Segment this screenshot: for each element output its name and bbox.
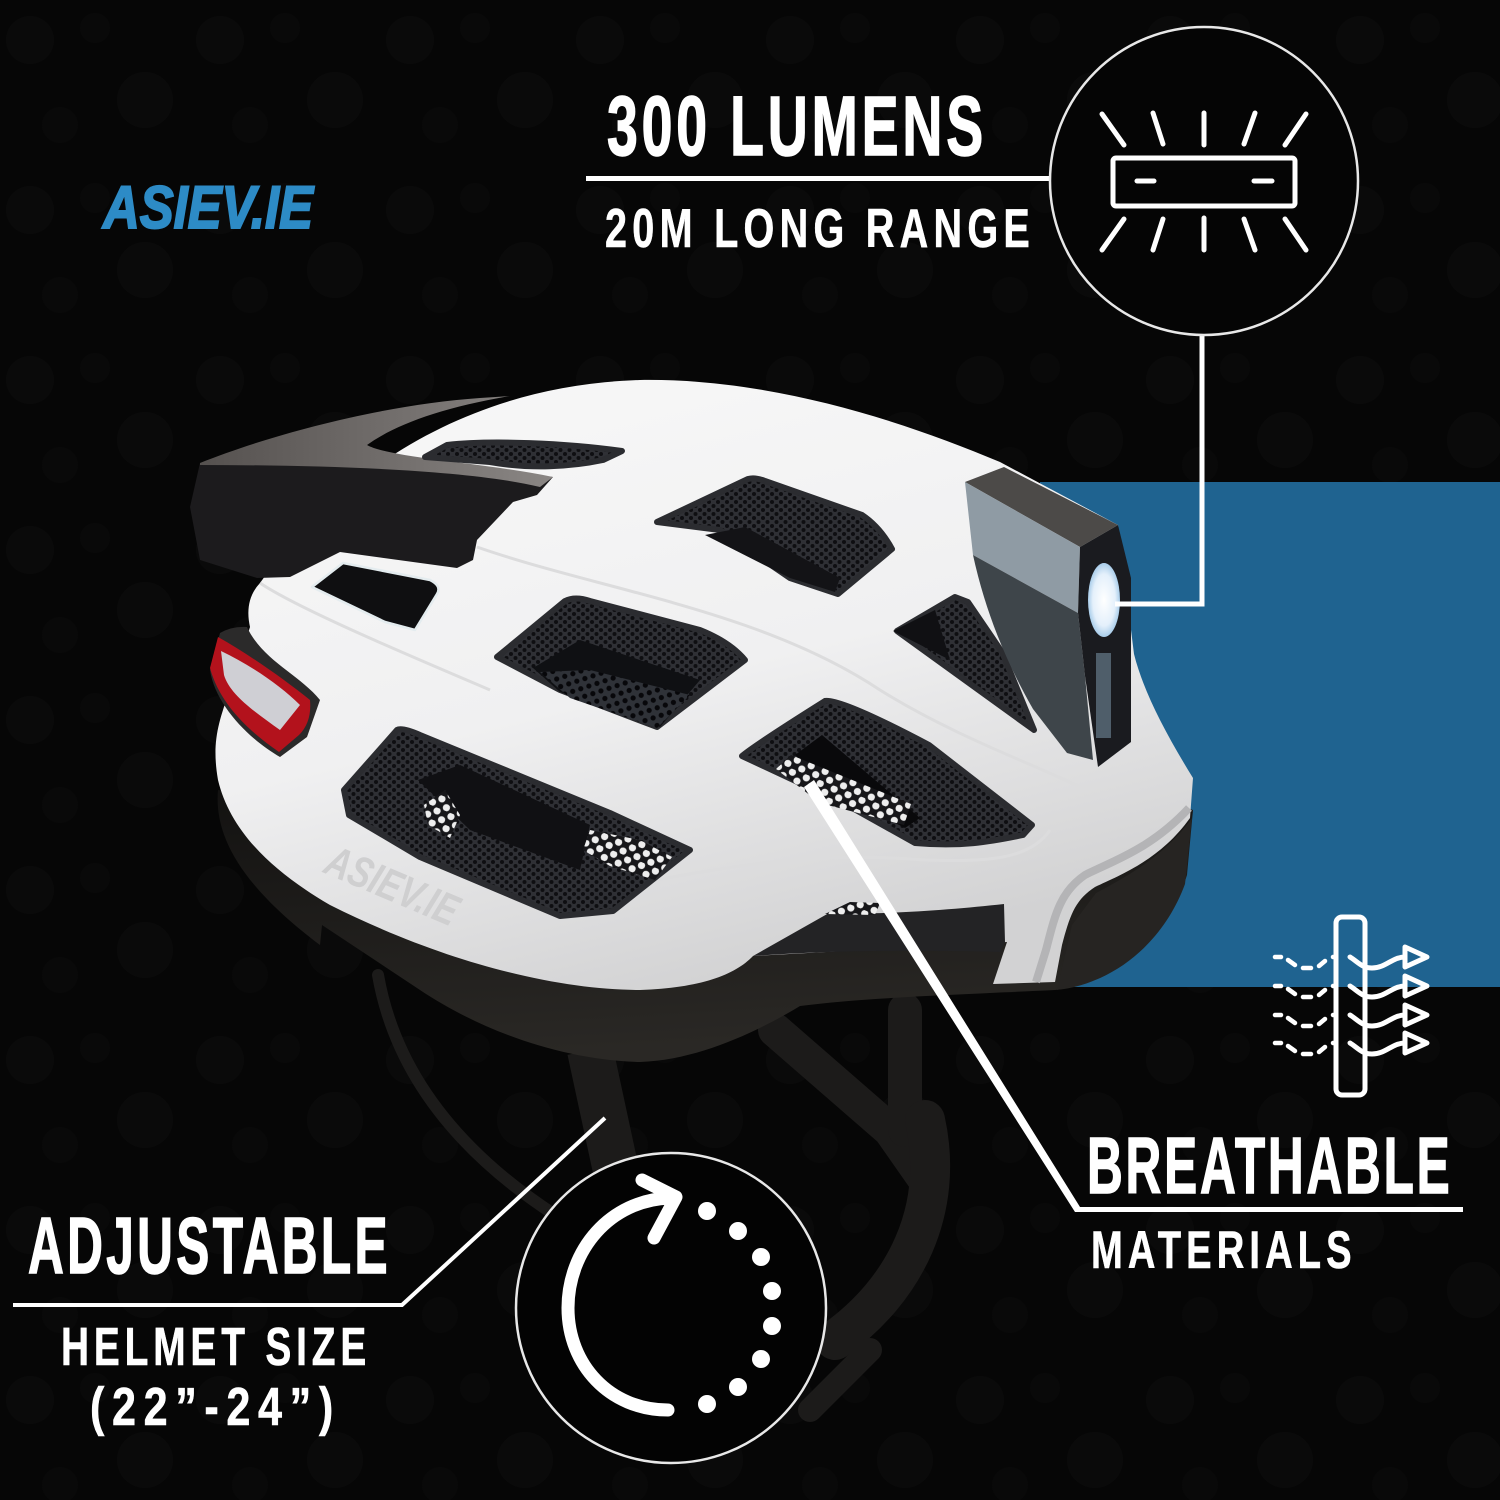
blue background band xyxy=(1040,482,1500,987)
vent: lower right xyxy=(742,701,1032,844)
subheading: helmet size: HELMET SIZE xyxy=(61,1316,366,1376)
callout: breathable materials xyxy=(1087,1122,1450,1279)
vent: upper middle xyxy=(657,478,892,594)
front black cheek xyxy=(1057,818,1192,990)
vent: middle xyxy=(497,598,745,727)
heading: breathable: BREATHABLE xyxy=(1087,1122,1450,1211)
embossed brand mark on shell: ASIEV.IE xyxy=(317,836,467,936)
white mesh: lower left vent xyxy=(424,790,460,838)
icon: airflow through fabric xyxy=(1275,917,1427,1095)
vent: bottom front xyxy=(753,904,1005,956)
front light module xyxy=(965,467,1131,767)
white mesh: lower right vent xyxy=(776,755,911,825)
leader line: adjustable xyxy=(13,1118,605,1305)
vent: front triangular xyxy=(897,597,1034,730)
brand logo: ASIEV.IE xyxy=(101,174,315,241)
subheading: range: 20M LONG RANGE xyxy=(605,199,1030,260)
visor upper grey wedge xyxy=(200,396,553,487)
lower black liner xyxy=(218,780,1193,1062)
module top strip xyxy=(965,467,1118,547)
vent: top rear xyxy=(425,443,622,466)
helmet straps xyxy=(378,975,930,1410)
heading: 300 lumens: 300 LUMENS xyxy=(607,81,985,174)
icon circle: light beam xyxy=(1050,27,1358,335)
subheading: size range: (22”-24”) xyxy=(90,1378,333,1437)
rear dark visor xyxy=(190,396,553,578)
module black front xyxy=(1078,525,1131,767)
heading: adjustable: ADJUSTABLE xyxy=(28,1202,388,1291)
callout: adjustable helmet size xyxy=(28,1202,388,1437)
visor dark body xyxy=(190,458,553,578)
front rim detail xyxy=(1036,808,1189,982)
helmet photo illustration xyxy=(190,380,1193,1410)
divider line to lumens icon xyxy=(586,176,1050,181)
rear red tail light xyxy=(210,627,320,757)
vent: rear small xyxy=(312,563,438,630)
module dark face xyxy=(973,555,1093,760)
leader line: headlight to icon xyxy=(1115,334,1202,604)
vent: lower left xyxy=(344,729,690,916)
headlight lens xyxy=(1088,563,1120,637)
callout: 300 lumens xyxy=(586,81,1050,260)
battery indicator window xyxy=(1096,653,1111,738)
shell ridge shading xyxy=(260,547,1085,900)
module grey face xyxy=(965,482,1080,613)
leader line: breathable xyxy=(804,780,1463,1212)
white shell xyxy=(215,380,1193,990)
icon circle: adjustment dial xyxy=(516,1153,826,1463)
subheading: materials: MATERIALS xyxy=(1091,1220,1352,1279)
